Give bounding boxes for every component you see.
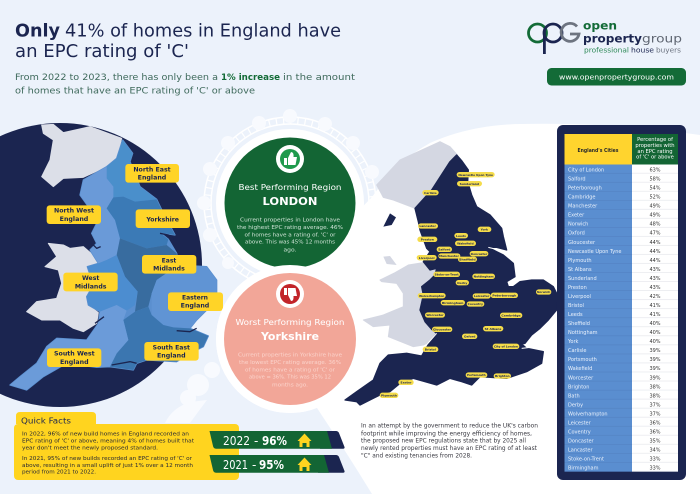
city: Carlisle (422, 190, 439, 195)
label: West Midlands (63, 273, 118, 291)
city: Nottingham (472, 274, 495, 279)
panel: worst performing region: Yorkshire (260, 330, 319, 343)
city names column: Leicester (568, 420, 592, 426)
stat bar: 2022 96% (210, 431, 345, 449)
city: Sheffield (458, 257, 477, 262)
text block: EPC regulations: "C" and existing tenancies from 2028. (361, 453, 472, 460)
city names column: Portsmouth (568, 357, 597, 363)
stat bar: 2021 95%: 95% (259, 458, 284, 472)
city: Stoke-on-Trent (433, 272, 460, 277)
stat bar: 2022 96%: 2022 (223, 434, 250, 448)
city names column: Newcastle Upon Tyne (568, 249, 621, 255)
subtitle (15, 72, 356, 96)
city names column: York (567, 339, 579, 345)
city names column: Sheffield (568, 321, 590, 327)
label: North East England: North East (133, 166, 171, 173)
city: Carlisle: Carlisle (424, 191, 437, 195)
city names column: Cambridge (568, 195, 595, 201)
percentages column: 38% (649, 384, 661, 390)
city names column: Wakefield (568, 366, 592, 372)
city: Peterborough: Peterborough (492, 293, 516, 297)
panel: quick facts: EPC rating of 'C' or above, meaning 4% of homes built that (22, 438, 194, 444)
icon: thumbs up (276, 145, 304, 173)
text block: EPC regulations: the proposed new EPC regulations state that by 2025 all (361, 438, 526, 445)
percentages column: 39% (649, 366, 661, 372)
label: South West England (47, 348, 101, 367)
subtitle: of homes that have an EPC rating of 'C' or above (15, 86, 255, 96)
city: Norwich (536, 289, 551, 295)
stat bar: 2022 96%: - (254, 434, 258, 448)
city: City of London (493, 344, 519, 349)
panel: worst performing region: of homes have a rating of 'C' or (245, 367, 336, 373)
percentages column: 36% (649, 420, 661, 426)
city: Doncaster (470, 251, 488, 256)
city: Coventry (467, 301, 484, 307)
city: Portsmouth (466, 372, 487, 378)
city names column: Preston (568, 285, 587, 291)
label: North West England (47, 205, 101, 224)
label: South West England: South West (54, 351, 95, 358)
city: Leeds (454, 233, 468, 238)
city: St Albans (483, 326, 503, 331)
subtitle: 1% increase (221, 72, 280, 82)
city: Wakefield (455, 241, 476, 246)
city: Cambridge: Cambridge (501, 313, 521, 317)
panel: quick facts: period from 2021 to 2022. (22, 470, 96, 476)
percentages column: 39% (649, 375, 661, 381)
city names column: Gloucester (568, 240, 596, 246)
table: England's cities (557, 125, 686, 480)
city: Stoke-on-Trent: Stoke-on-Trent (435, 272, 459, 276)
city: Manchester: Manchester (439, 254, 460, 258)
city: Oxford: Oxford (464, 334, 475, 338)
city names column: Stoke-on-Trent (568, 457, 604, 463)
panel: best performing region: LONDON (262, 195, 318, 208)
city map of England (345, 142, 558, 405)
city: City of London: City of London (494, 344, 518, 348)
city: Portsmouth: Portsmouth (467, 373, 486, 377)
percentages column: 47% (649, 231, 661, 237)
percentages column: 41% (649, 312, 661, 318)
percentages column: 38% (649, 393, 661, 399)
percentages column: 34% (649, 448, 661, 454)
stat bar: 2021 95%: 2021 (223, 458, 248, 472)
label: North West England: England (60, 216, 88, 223)
percentages column: 44% (649, 258, 661, 264)
city: Peterborough (491, 293, 518, 298)
panel: worst performing region: months ago. (272, 382, 308, 388)
city: Plymouth: Plymouth (381, 393, 397, 397)
panel: worst performing region: the lowest EPC rating average. 36% (239, 360, 341, 366)
label: West Midlands: West (82, 275, 99, 282)
label: East Midlands (142, 255, 196, 274)
logo: open property group (528, 19, 682, 55)
panel: worst performing region: Current properties in Yorkshire have (238, 353, 343, 359)
city: Sunderland: Sunderland (460, 182, 479, 186)
label: North East England (125, 164, 179, 183)
table header: percentage: properties with (635, 143, 675, 149)
label: Eastern England: England (181, 303, 209, 310)
city: Derby: Derby (457, 281, 467, 285)
city names column: Doncaster (568, 438, 595, 444)
percentages column: 42% (649, 294, 661, 300)
percentages column: 33% (649, 466, 661, 472)
logo: open property group: house (631, 47, 654, 55)
percentages column: 40% (649, 339, 661, 345)
stat bar: 2021 95%: - (252, 458, 256, 472)
left regional map (0, 123, 223, 407)
city: Brighton (494, 373, 511, 379)
panel: quick facts: In 2022, 96% of new build homes in England recorded an (22, 432, 189, 438)
city: Manchester (438, 253, 460, 259)
panel: quick facts: above, resulting in a small uplift of just 1% over a 12 month (22, 463, 193, 469)
city: Sunderland (457, 181, 482, 186)
city: Lancaster: Lancaster (419, 224, 436, 228)
city names column: Peterborough (568, 186, 602, 192)
percentages column: 43% (649, 285, 661, 291)
text block: EPC regulations: newly rented properties must have an EPC rating of at least (361, 445, 538, 452)
city: Worcester: Worcester (426, 313, 444, 317)
city: Brighton: Brighton (495, 374, 510, 378)
text block: EPC regulations: In an attempt by the government to reduce the UK's carbon (361, 423, 538, 430)
logo: open property group: open (583, 19, 617, 33)
panel: quick facts: In 2021, 95% of new builds recorded an EPC rating of 'C' or (22, 456, 193, 462)
label: North East England: England (138, 175, 166, 182)
city names column: Nottingham (568, 330, 598, 336)
city: Gloucester: Gloucester (433, 327, 452, 331)
panel: best performing region: ago. (284, 247, 297, 253)
percentages column: 43% (649, 267, 661, 273)
city: Leicester: Leicester (474, 294, 490, 298)
panel: worst performing region: Worst Performing Region (236, 317, 344, 327)
city: Exeter (398, 380, 414, 385)
panel: best performing region (216, 138, 364, 413)
percentages column: 49% (649, 204, 661, 210)
label: South East England: England (157, 353, 186, 360)
panel: best performing region: of homes have a rating of. 'C' or (244, 232, 336, 238)
city names column: Bristol (568, 303, 584, 309)
percentages column: 37% (649, 402, 661, 408)
city names column: City of London (568, 168, 604, 174)
label: South East England: South East (153, 344, 190, 351)
title: 41% of homes in England have (65, 22, 341, 42)
city: Norwich: Norwich (537, 290, 550, 294)
city: Bristol (423, 347, 438, 352)
stat bar: 2021 95% (210, 455, 345, 473)
logo: open property group: buyers (656, 47, 681, 55)
city names column: Leeds (568, 312, 583, 318)
city names column: Derby (568, 402, 583, 408)
city names column: Sunderland (568, 276, 597, 282)
percentages column: 39% (649, 357, 661, 363)
city names column: Exeter (568, 213, 585, 219)
city: Birmingham: Birmingham (442, 301, 463, 305)
label: West Midlands: Midlands (75, 283, 107, 290)
city: Nottingham: Nottingham (474, 274, 494, 278)
panel: best performing region: Current properties in London have (240, 218, 341, 224)
percentages column: 39% (649, 348, 661, 354)
percentages column: 52% (649, 195, 661, 201)
logo: open property group: property (583, 32, 643, 46)
subtitle: From 2022 to 2023, there has only been a (15, 72, 218, 82)
city: Wolverhampton: Wolverhampton (419, 294, 444, 298)
percentages column: 41% (649, 303, 661, 309)
percentages column: 36% (649, 430, 661, 436)
city: Oxford (462, 334, 477, 339)
city: Gloucester (432, 327, 452, 332)
panel: quick facts: year don't meet the newly proposed standard. (22, 445, 158, 451)
percentages column: 35% (649, 438, 661, 444)
panel: worst performing region: above = 36%. This was 35% 12 (249, 375, 331, 381)
city: Leeds: Leeds (456, 234, 466, 238)
percentages column: 37% (649, 411, 661, 417)
panel: best performing region: the highest EPC rating average. 46% (237, 225, 343, 231)
percentages column: 54% (649, 186, 661, 192)
city: Salford (437, 247, 452, 252)
city names column: Plymouth (568, 258, 592, 264)
city names column: St Albans (568, 267, 592, 273)
logo: open property group: professional (584, 47, 629, 55)
city names column: Birmingham (568, 466, 599, 472)
website url button: www.openpropertygroup.com (559, 73, 674, 81)
table header: percentage: an EPC rating (637, 149, 673, 155)
label: South East England (144, 342, 199, 361)
city names column: Manchester (568, 204, 598, 210)
percentages column: 63% (649, 168, 661, 174)
table header: percentage (632, 134, 678, 164)
label: Yorkshire (136, 209, 190, 228)
table header: cities (564, 134, 632, 164)
label: Eastern England: Eastern (182, 294, 208, 301)
table header: cities: England's Cities (578, 148, 618, 154)
city: Exeter: Exeter (401, 380, 412, 384)
city names column: Worcester (568, 375, 594, 381)
percentages column: 49% (649, 213, 661, 219)
panel: best performing region: above. This was 45% 12 months (245, 240, 335, 246)
city: Bristol: Bristol (425, 347, 436, 351)
table header: percentage: Percentage of (637, 137, 673, 143)
panel: best performing region: Best Performing Region (238, 182, 342, 192)
city names column (564, 164, 632, 472)
percentages column: 40% (649, 321, 661, 327)
percentages column: 44% (649, 240, 661, 246)
percentages column: 58% (649, 176, 661, 182)
city: Coventry: Coventry (468, 302, 483, 306)
title: Only (15, 22, 61, 42)
percentages column (632, 164, 678, 472)
city: Worcester (425, 312, 445, 318)
city: Liverpool: Liverpool (419, 256, 434, 260)
city: Lancaster (418, 223, 438, 229)
percentages column: 40% (649, 330, 661, 336)
city: Newcastle Upon Tyne: Newcastle Upon Tyne (458, 173, 493, 177)
icon: thumbs down (276, 280, 304, 308)
percentages column: 48% (649, 222, 661, 228)
city: Salford: Salford (438, 247, 450, 251)
city names column: Liverpool (568, 294, 591, 300)
city names column: Wolverhampton (568, 411, 608, 417)
city names column: Salford (568, 176, 586, 182)
city names column: Carlisle (568, 348, 586, 354)
city names column: Bath (568, 393, 580, 399)
panel: worst performing region (224, 273, 356, 405)
text block: EPC regulations: footprint while improving the energy efficiency of homes, (361, 430, 532, 437)
panel: quick facts: Quick Facts (21, 416, 71, 426)
percentages column: 33% (649, 457, 661, 463)
panel: quick facts (14, 412, 239, 480)
city: Derby (456, 280, 469, 285)
label: Yorkshire: Yorkshire (145, 216, 179, 223)
city: Leicester (473, 293, 491, 299)
label: East Midlands: East (162, 257, 176, 264)
city: Preston (417, 237, 437, 242)
city: York (478, 227, 491, 232)
city names column: Lancaster (568, 448, 593, 454)
city: Preston: Preston (421, 237, 434, 241)
city: Liverpool (417, 255, 437, 260)
label: East Midlands: Midlands (153, 266, 185, 273)
city names column: Brighton (568, 384, 589, 390)
text block: EPC regulations (361, 423, 538, 460)
city: Cambridge (500, 313, 522, 318)
title (15, 22, 341, 62)
label: South West England: England (60, 359, 89, 366)
city: Birmingham (441, 300, 465, 305)
city names column: Norwich (568, 222, 588, 228)
icon: house (298, 458, 312, 471)
city names column: Coventry (568, 430, 591, 436)
city: St Albans: St Albans (485, 327, 502, 331)
city: Doncaster: Doncaster (471, 252, 488, 256)
subtitle: in the amount (283, 72, 356, 82)
stat bar: 2022 96%: 96% (262, 434, 287, 448)
city: York: York (480, 227, 489, 231)
label: Eastern England (168, 292, 223, 311)
city: Plymouth (380, 393, 398, 398)
logo: open property group: group (642, 32, 682, 46)
percentages column: 44% (649, 249, 661, 255)
city names column: Oxford (568, 231, 585, 237)
label: North West England: North West (54, 208, 94, 215)
icon: house (298, 434, 312, 447)
title: an EPC rating of 'C' (15, 42, 189, 62)
table header: percentage: of 'C' or above (636, 155, 674, 161)
city: Wakefield: Wakefield (457, 241, 474, 245)
percentages column: 43% (649, 276, 661, 282)
website url button (547, 68, 686, 86)
city: Sheffield: Sheffield (459, 257, 476, 261)
